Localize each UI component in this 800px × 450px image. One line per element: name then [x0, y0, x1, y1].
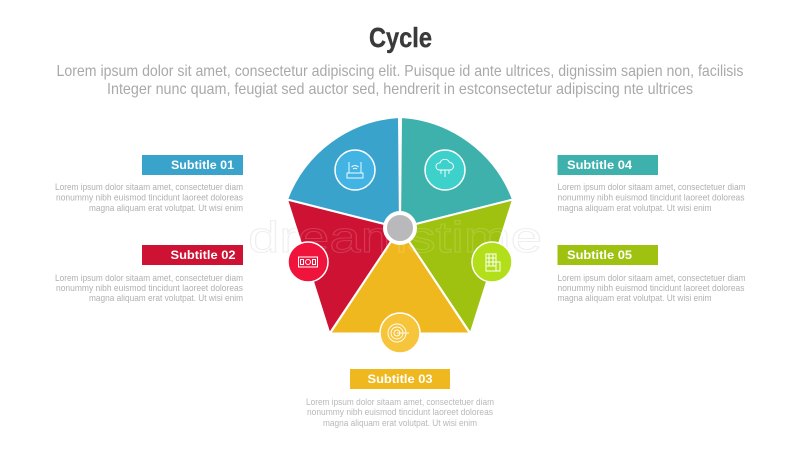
title: Cycle	[369, 22, 432, 53]
panel: subtitle 04: Subtitle 04	[567, 158, 632, 172]
panel: subtitle 01: Subtitle 01	[171, 158, 234, 172]
panel: subtitle 05: Lorem ipsum dolor sitaam amet, consectetuer diam	[558, 273, 746, 284]
icon: banknote	[288, 242, 328, 282]
panel: subtitle 03: Lorem ipsum dolor sitaam amet, consectetuer diam	[306, 397, 494, 408]
panel: subtitle 02	[55, 245, 243, 304]
panel: subtitle 01	[55, 155, 243, 214]
panel: subtitle 03: magna aliquam erat volutpat. Ut wisi enim	[323, 418, 477, 429]
segment 4 teal	[400, 117, 513, 228]
panel: subtitle 03: Subtitle 03	[368, 372, 433, 386]
panel: subtitle 04: Lorem ipsum dolor sitaam amet, consectetuer diam	[558, 182, 746, 193]
segment 2 red	[287, 200, 400, 334]
icon: cloud network	[425, 150, 465, 190]
watermark outline on background: dreamstime	[248, 213, 542, 262]
panel: subtitle 05: nonummy nibh euismod tincidunt laoreet doloreas	[558, 283, 745, 294]
panel: subtitle 02: Subtitle 02	[170, 248, 236, 262]
panel: subtitle 03	[306, 369, 494, 429]
icon: router	[335, 150, 375, 190]
intro text	[56, 63, 744, 98]
panel: subtitle 02: nonummy nibh euismod tincidunt laoreet doloreas	[56, 283, 243, 294]
watermark outline on chart: dreamstime	[248, 213, 542, 262]
panel: subtitle 01: magna aliquam erat volutpat. Ut wisi enim	[89, 203, 243, 214]
panel: subtitle 02: magna aliquam erat volutpat. Ut wisi enim	[89, 293, 243, 304]
panel: subtitle 03: nonummy nibh euismod tincidunt laoreet doloreas	[307, 407, 493, 418]
segment 3 yellow	[330, 228, 470, 334]
segment 5 green	[400, 200, 513, 334]
panel: subtitle 04	[558, 155, 746, 214]
panel: subtitle 02: Lorem ipsum dolor sitaam amet, consectetuer diam	[55, 273, 243, 284]
icon: building	[472, 242, 512, 282]
pentagon cycle chart	[287, 117, 513, 334]
icon: target	[380, 313, 420, 353]
panel: subtitle 04: nonummy nibh euismod tincidunt laoreet doloreas	[558, 192, 745, 204]
panel: subtitle 05: Subtitle 05	[567, 248, 632, 262]
panel: subtitle 01: nonummy nibh euismod tincidunt laoreet doloreas	[56, 192, 243, 204]
center hub	[385, 213, 415, 243]
segment 1 blue	[287, 117, 400, 228]
panel: subtitle 04: magna aliquam erat volutpat. Ut wisi enim	[558, 203, 712, 214]
intro text: Integer nunc quam, feugiat sed auctor sed, hendrerit in estconsectetur adipiscing nte ultrices	[107, 81, 693, 98]
panel: subtitle 01: Lorem ipsum dolor sitaam amet, consectetuer diam	[55, 182, 243, 193]
panel: subtitle 05: magna aliquam erat volutpat. Ut wisi enim	[558, 293, 712, 304]
panel: subtitle 05	[558, 245, 746, 304]
